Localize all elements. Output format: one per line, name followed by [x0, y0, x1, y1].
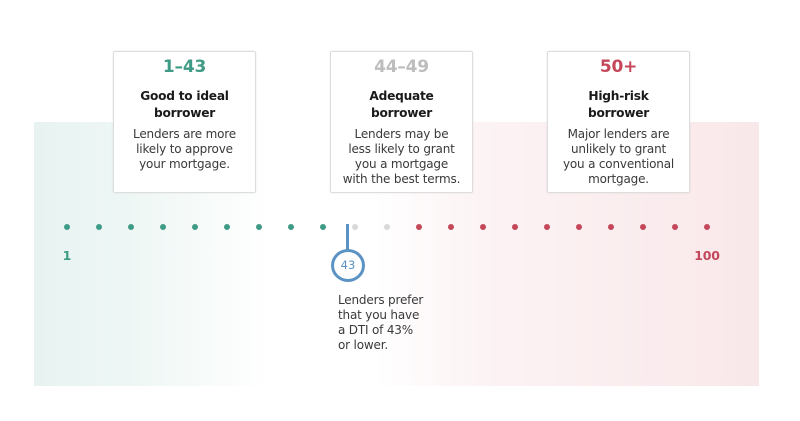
card: 50+ high-risk borrower	[547, 51, 690, 193]
text: high-risk borrower description	[563, 127, 674, 186]
text: lenders prefer note: or lower.	[338, 338, 388, 352]
text: lenders prefer note: Lenders prefer	[338, 293, 423, 307]
heading: high-risk borrower: borrower	[588, 106, 649, 120]
text: high-risk borrower description: mortgage.	[588, 172, 649, 186]
text: adequate borrower description: you a mortgage	[355, 157, 448, 171]
text: good borrower description: likely to approve	[136, 142, 233, 156]
text: high-risk borrower description: you a conventional	[563, 157, 674, 171]
text: high-risk borrower description: Major lenders are	[568, 127, 669, 141]
text: adequate borrower description: with the best terms.	[343, 172, 460, 186]
range: 1-43: 1–43	[163, 57, 206, 77]
heading: adequate borrower: Adequate	[369, 89, 434, 103]
text: good borrower description	[133, 127, 236, 171]
range: 50+: 50+	[600, 57, 637, 77]
range: 44-49: 44–49	[374, 57, 429, 77]
marker circle with 43: 43	[341, 258, 355, 272]
heading: high-risk borrower: High-risk	[588, 89, 649, 103]
text: lenders prefer note: that you have	[338, 308, 419, 322]
scale label: 100: 100	[694, 248, 720, 263]
heading: good to ideal borrower: Good to ideal	[140, 89, 229, 103]
marker: 43 pin	[331, 224, 365, 282]
text: lenders prefer note	[338, 293, 424, 352]
heading: good to ideal borrower	[140, 89, 229, 120]
text: high-risk borrower description: unlikely to grant	[571, 142, 666, 156]
heading: adequate borrower	[369, 89, 434, 120]
heading: good to ideal borrower: borrower	[154, 106, 215, 120]
marker stem	[346, 224, 349, 250]
card: 1-43 good to ideal borrower	[113, 51, 256, 193]
marker circle with 43	[331, 249, 365, 282]
heading: adequate borrower: borrower	[371, 106, 432, 120]
text: good borrower description: your mortgage.	[139, 157, 230, 171]
text: adequate borrower description: less likely to grant	[348, 142, 455, 156]
text: good borrower description: Lenders are more	[133, 127, 236, 141]
text: lenders prefer note: a DTI of 43%	[338, 323, 413, 337]
heading: high-risk borrower	[588, 89, 650, 120]
text: adequate borrower description	[343, 127, 460, 186]
background gradient panel	[34, 122, 759, 386]
card: 44-49 adequate borrower	[330, 51, 473, 193]
scale label: 1: 1	[63, 248, 71, 263]
text: adequate borrower description: Lenders may be	[355, 127, 448, 141]
